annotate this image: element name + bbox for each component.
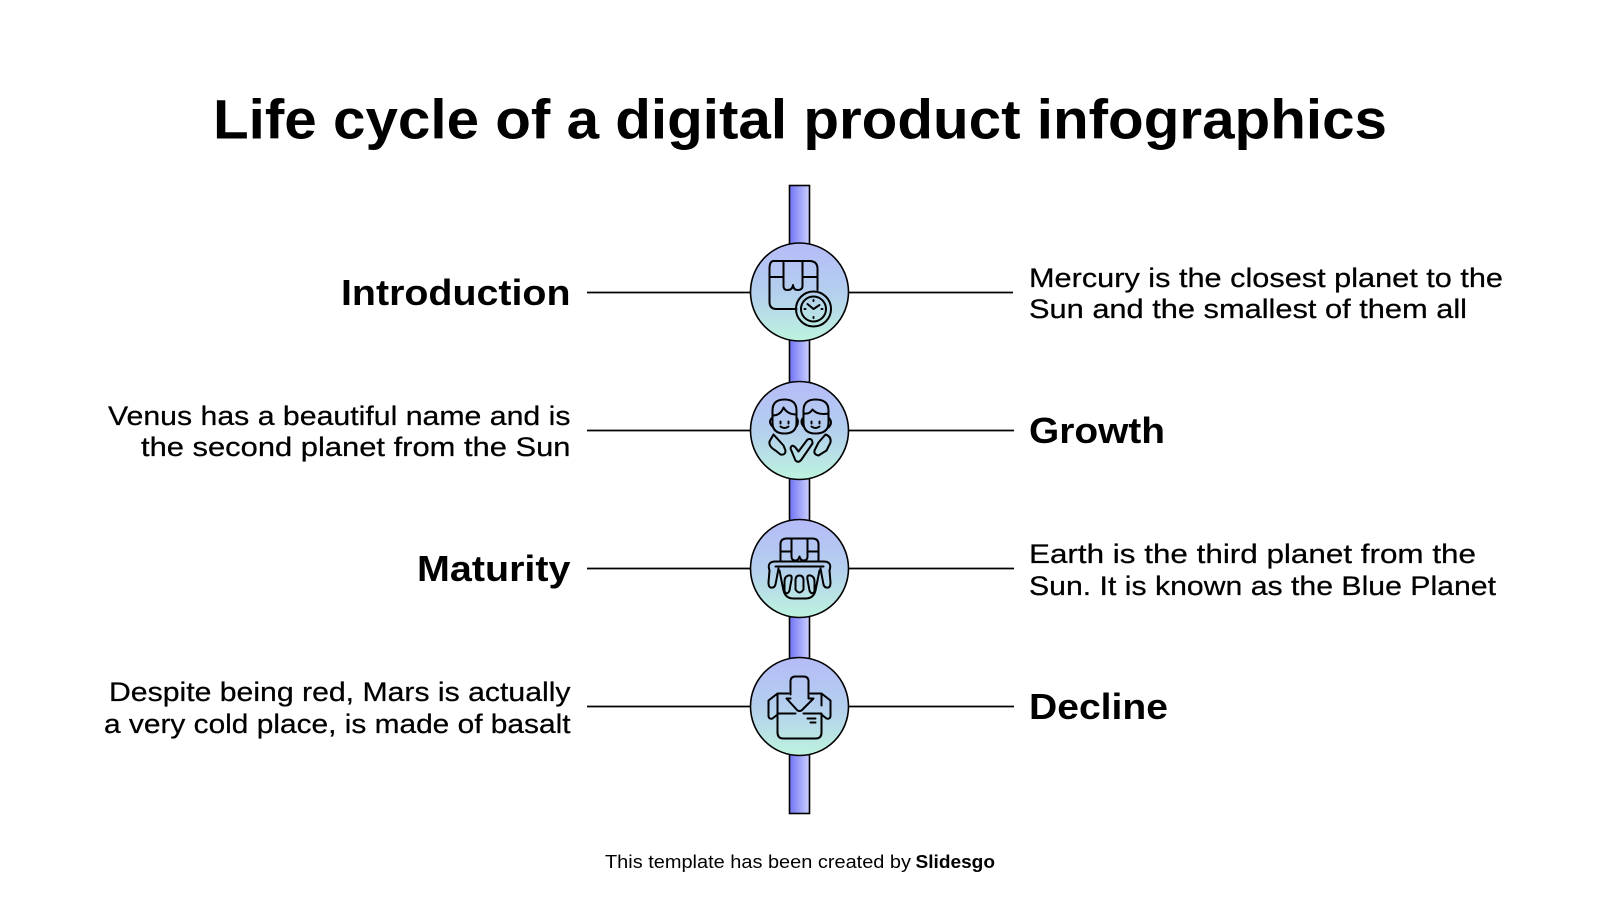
stage 2: growth	[108, 382, 1165, 480]
stage 4: decline	[104, 658, 1168, 756]
description: Earth: Sun. It is known as the Blue Planet	[1029, 571, 1497, 601]
heading: Maturity: Maturity	[417, 548, 570, 589]
connector lines	[587, 292, 1014, 706]
footer credit: Slidesgo	[916, 851, 995, 872]
stage 1: introduction	[341, 243, 1503, 341]
icon: two people with check	[750, 382, 848, 480]
description: Venus: the second planet from the Sun	[141, 432, 570, 462]
title: Life cycle of a digital product infographics	[213, 88, 1387, 150]
description: Venus	[108, 401, 570, 462]
description: Earth	[1029, 539, 1497, 601]
description: Venus: Venus has a beautiful name and is	[108, 401, 570, 431]
description: Mars: a very cold place, is made of basalt	[104, 709, 571, 739]
icon: box with clock	[750, 243, 848, 341]
description: Mercury	[1029, 263, 1503, 324]
description: Mercury: Mercury is the closest planet to the	[1029, 263, 1503, 293]
footer credit: This template has been created by	[605, 851, 912, 872]
heading: Decline: Decline	[1029, 686, 1168, 727]
description: Earth: Earth is the third planet from the	[1029, 539, 1476, 569]
icon: box with down arrow	[750, 658, 848, 756]
description: Mars	[104, 677, 571, 739]
heading: Growth: Growth	[1029, 410, 1165, 451]
description: Mercury: Sun and the smallest of them all	[1029, 294, 1467, 324]
description: Mars: Despite being red, Mars is actually	[109, 677, 571, 707]
heading: Introduction: Introduction	[341, 272, 570, 313]
stage 3: maturity	[417, 520, 1497, 618]
icon: shopping basket	[750, 520, 848, 618]
timeline bar	[790, 186, 810, 814]
